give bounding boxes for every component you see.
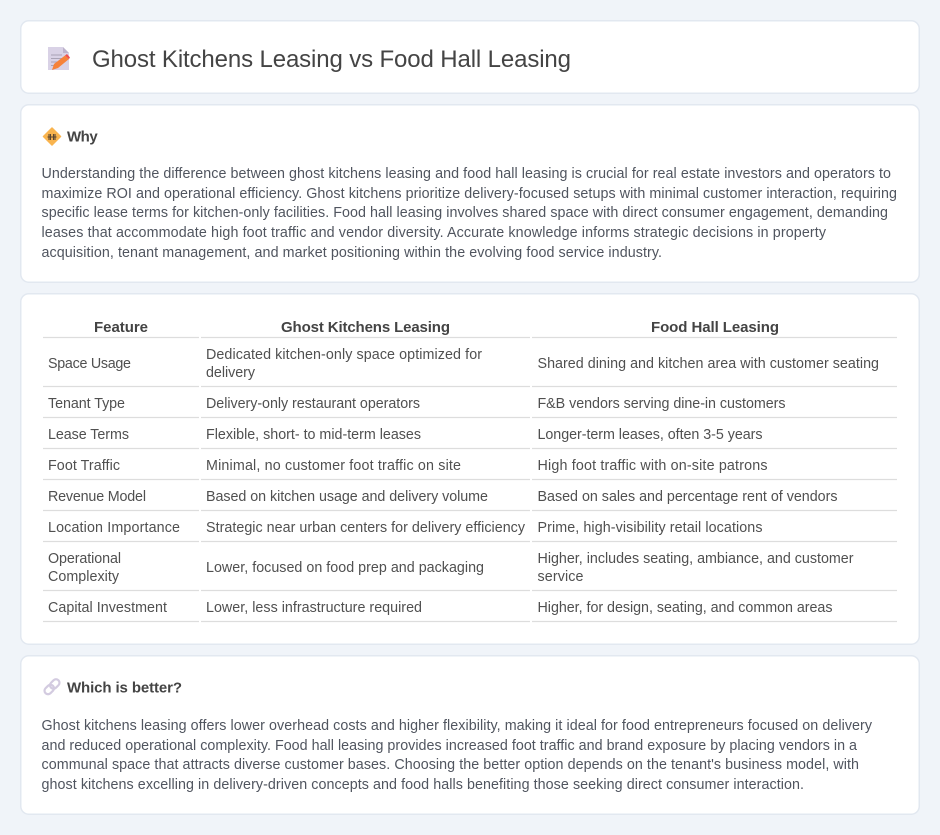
table row: revenue model: Revenue Model — [48, 489, 146, 505]
table header row: Feature — [94, 319, 148, 336]
icon: orange diamond sign — [44, 128, 60, 145]
text block: which is better paragraph: ghost kitchens excelling in delivery-driven concepts and food halls benefiting those seeking direct consumer interaction. — [42, 777, 804, 793]
table row: tenant type — [43, 396, 897, 418]
table row: lease terms: Flexible, short- to mid-term leases — [206, 427, 421, 443]
heading: which is better: Which is better? — [67, 680, 182, 697]
icon: chain link — [43, 678, 61, 696]
table row: location importance: Prime, high-visibility retail locations — [538, 520, 762, 536]
table row: tenant type: Tenant Type — [48, 396, 125, 412]
table row: lease terms: Longer-term leases, often 3-5 years — [538, 427, 762, 443]
table row: operational complexity: Complexity — [48, 569, 120, 585]
table row: operational complexity: Lower, focused on food prep and packaging — [206, 560, 484, 576]
table row: revenue model — [43, 489, 897, 510]
table row: tenant type: Delivery-only restaurant operators — [206, 396, 420, 412]
text block: which is better paragraph — [42, 718, 873, 793]
table row: capital investment: Lower, less infrastructure required — [206, 600, 422, 616]
table row: foot traffic: Minimal, no customer foot traffic on site — [206, 458, 461, 474]
table row: lease terms: Lease Terms — [48, 427, 129, 443]
table header row: Food Hall Leasing — [651, 319, 779, 336]
panel: why — [21, 105, 919, 282]
table row: location importance: Strategic near urban centers for delivery efficiency — [206, 520, 526, 536]
text block: why paragraph: maximize ROI and operational efficiency. Ghost kitchens prioritize delivery-focused setups with minimal customer interaction, requiring — [42, 186, 897, 202]
heading: why: Why — [67, 129, 98, 146]
table row: location importance: Location Importance — [48, 520, 180, 536]
table row: foot traffic — [43, 458, 897, 480]
panel: comparison table — [21, 294, 919, 644]
table row: space usage: Dedicated kitchen-only space optimized for — [206, 347, 482, 363]
table row: space usage: Shared dining and kitchen area with customer seating — [538, 356, 879, 372]
table row: space usage — [43, 347, 897, 386]
text block: which is better paragraph: communal space that attracts diverse customer bases. Choosing the better option depends on the tenant's business model, with — [42, 757, 859, 773]
text block: why paragraph: Understanding the difference between ghost kitchens leasing and food hall leasing is crucial for real estate investors and operators to — [42, 166, 891, 182]
text block: why paragraph: specific lease terms for kitchen-only facilities. Food hall leasing involves shared space with direct consumer engagement, demanding — [42, 205, 888, 221]
panel: title header — [21, 21, 919, 93]
table row: foot traffic: High foot traffic with on-site patrons — [538, 458, 768, 474]
panel: which is better — [21, 656, 919, 814]
table row: lease terms — [43, 427, 897, 448]
text block: why paragraph — [42, 166, 897, 261]
table row: space usage: delivery — [206, 365, 256, 381]
table row: operational complexity: service — [538, 569, 584, 585]
table row: operational complexity: Operational — [48, 551, 121, 567]
text block: why paragraph: leases that accommodate high foot traffic and vendor diversity. Accurate knowledge informs strategic decisions in property — [42, 225, 827, 241]
icon: memo document with pencil — [48, 47, 70, 70]
table row: tenant type: F&B vendors serving dine-in customers — [538, 396, 786, 412]
table row: operational complexity: Higher, includes seating, ambiance, and customer — [538, 551, 854, 567]
text block: why paragraph: acquisition, tenant management, and market positioning within the evolving food service industry. — [42, 245, 662, 261]
table header row: Ghost Kitchens Leasing — [281, 319, 450, 336]
table row: capital investment: Higher, for design, seating, and common areas — [538, 600, 832, 616]
text block: which is better paragraph: and reduced operational complexity. Food hall leasing provides increased foot traffic and brand exposure by placing vendors in a — [42, 738, 857, 754]
table row: revenue model: Based on sales and percentage rent of vendors — [538, 489, 838, 505]
table header row — [43, 319, 897, 338]
table row: capital investment — [43, 600, 897, 622]
table row: space usage: Space Usage — [48, 356, 131, 372]
text block: which is better paragraph: Ghost kitchens leasing offers lower overhead costs and higher flexibility, making it ideal for food entrepreneurs focused on delivery — [42, 718, 873, 734]
table row: revenue model: Based on kitchen usage and delivery volume — [206, 489, 488, 505]
table row: capital investment: Capital Investment — [48, 600, 167, 616]
table row: operational complexity — [43, 551, 897, 590]
table row: location importance — [43, 520, 897, 542]
title: Ghost Kitchens Leasing vs Food Hall Leasing — [92, 46, 571, 73]
table row: foot traffic: Foot Traffic — [48, 458, 120, 474]
